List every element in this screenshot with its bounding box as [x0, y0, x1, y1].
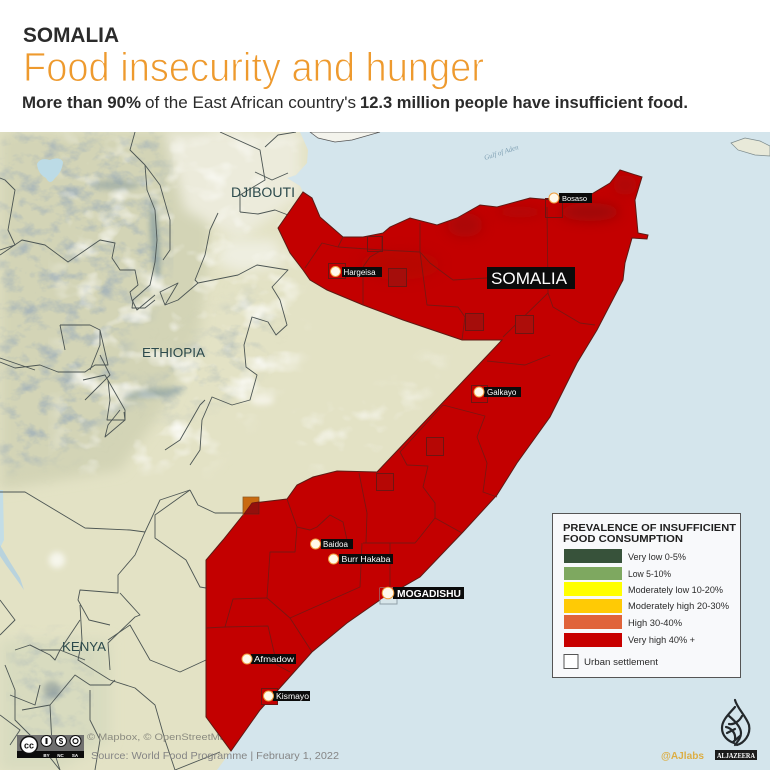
Yemen coast and Socotra: [310, 132, 380, 142]
city marker: Hargeisa: [330, 266, 382, 277]
urban settlement squares: [262, 198, 562, 704]
label: Gulf of Aden: Gulf of Aden: [483, 143, 520, 162]
legend labels: Very high 40% +: [628, 635, 695, 645]
label: Ethiopia: ETHIOPIA: [142, 345, 205, 360]
legend labels: [584, 552, 729, 667]
source line: Source: World Food Programme | February 1, 2022: [91, 750, 339, 762]
city marker: Bosaso: Bosaso: [562, 194, 587, 203]
city marker: Mogadishu: MOGADISHU: [397, 589, 461, 600]
pale patches: [250, 395, 274, 405]
lakes: [37, 158, 63, 182]
AJ Labs handle: @AJlabs: [661, 750, 704, 762]
heading: Food insecurity and hunger: [23, 44, 484, 90]
label: Djibouti: DJIBOUTI: [231, 185, 295, 200]
city marker: Mogadishu: [382, 587, 464, 600]
icon: Creative Commons licence badge: BY: [43, 753, 50, 758]
icon: Creative Commons licence badge: cc: [24, 740, 34, 750]
city marker: Kismayo: Kismayo: [276, 692, 310, 701]
urban settlement: orange square: [243, 497, 259, 515]
city marker: Galkayo: [474, 387, 521, 397]
district boundaries: [206, 207, 595, 672]
country label: Somalia: SOMALIA: [491, 270, 567, 288]
city marker: Afmadow: [242, 654, 296, 664]
land: Horn of Africa: [0, 132, 520, 770]
legend labels: High 30-40%: [628, 618, 682, 628]
Somalia food consumption choropleth: [206, 170, 648, 751]
terrain colour wash: [0, 132, 210, 490]
icon: Creative Commons licence badge: NC: [57, 753, 64, 758]
kicker: SOMALIA: SOMALIA: [23, 24, 119, 47]
city marker: Bosaso: [549, 193, 592, 203]
panel: legend: FOOD CONSUMPTION: [563, 534, 683, 545]
city marker: Baidoa: Baidoa: [323, 540, 348, 549]
icon: Creative Commons licence badge: SA: [72, 753, 79, 758]
city marker: Burr Hakaba: [328, 554, 393, 564]
Mogadishu land overlap: [380, 588, 393, 600]
legend title: PREVALENCE OF INSUFFICIENT: [563, 523, 736, 534]
city marker: Burr Hakaba: Burr Hakaba: [342, 555, 391, 564]
urban settlement: overlap on border: [244, 502, 259, 514]
icon: Al Jazeera logo: ALJAZEERA: [717, 752, 755, 760]
city marker: Baidoa: [310, 539, 353, 549]
terrain shading: [360, 175, 637, 280]
subtitle: [22, 93, 688, 112]
panel: legend: [552, 514, 740, 678]
legend labels: Moderately low 10-20%: [628, 585, 723, 595]
legend labels: Moderately high 20-30%: [628, 601, 729, 611]
sea: [217, 132, 770, 770]
icon: Al Jazeera logo: [715, 700, 757, 760]
icon: Creative Commons licence badge: $: [59, 737, 64, 746]
city marker: Hargeisa: Hargeisa: [344, 268, 376, 277]
subtitle: 12.3 million people have insufficient food.: [360, 93, 688, 112]
region fill: [206, 170, 648, 751]
legend labels: Urban settlement: [584, 657, 659, 667]
city marker: Galkayo: Galkayo: [487, 388, 517, 397]
city marker: Kismayo: [264, 691, 310, 701]
country borders: [0, 132, 296, 770]
label: Kenya: KENYA: [62, 639, 106, 654]
city marker: Afmadow: Afmadow: [254, 655, 294, 664]
terrain texture: [0, 132, 165, 470]
legend labels: Low 5-10%: [628, 569, 671, 579]
legend labels: Very low 0-5%: [628, 552, 686, 562]
map attribution: © Mapbox, © OpenStreetMap: [87, 732, 232, 743]
title block: [22, 24, 688, 112]
country label: Somalia: [487, 267, 575, 289]
subtitle: More than 90%: [22, 93, 141, 112]
subtitle: of the East African country's: [145, 93, 356, 112]
icon: Creative Commons licence badge: [17, 735, 84, 758]
urban settlement: Mogadishu square: [380, 588, 397, 604]
legend swatches: [564, 549, 622, 563]
